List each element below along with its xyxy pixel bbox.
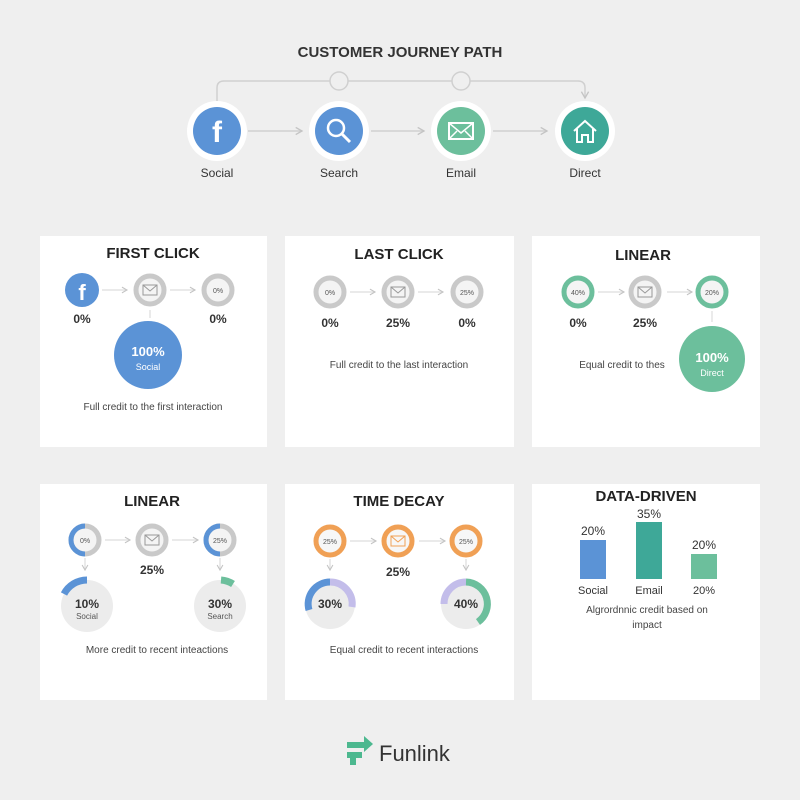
panel: data-driven [532,484,760,700]
icon: social: Social [201,166,233,180]
panel: data-driven: impact [632,620,662,631]
panel: data-driven: 20% [692,538,716,552]
panel: first click: 100% [131,344,165,359]
panel: linear bottom: 30% [208,597,232,611]
panel: linear bottom: More credit to recent inteactions [86,645,228,656]
panel: first click: 0% [73,312,91,326]
panel: data-driven: Algrordnnic credit based on [586,605,708,616]
logo: Funlink: Funlink [379,741,451,766]
panel: time decay: 25% [386,565,410,579]
panel: linear top [532,236,760,447]
icon: email [431,101,491,180]
panel: last click: 0% [325,290,335,297]
icon: direct [555,101,615,180]
panel: first click: FIRST CLICK [106,245,200,262]
panel: data-driven: 20% [693,585,715,597]
panel: time decay: 25% [323,539,337,546]
panel: linear bottom [40,484,267,700]
panel: time decay: Equal credit to recent interactions [330,645,478,656]
panel: linear top: 20% [705,290,719,297]
panel: last click: LAST CLICK [354,246,444,263]
panel: linear bottom: Social [76,612,98,621]
panel: linear top: LINEAR [615,247,671,264]
panel: last click [285,236,514,447]
logo: Funlink [347,736,451,766]
panel: linear top: 100% [695,350,729,365]
panel: linear bottom: 25% [213,538,227,545]
panel: time decay [285,484,514,700]
panel: first click: f [78,280,86,305]
icon: email: Email [446,166,476,180]
journey connector [217,72,585,131]
title: CUSTOMER JOURNEY PATH [298,44,502,61]
panel: first click: Social [136,362,160,372]
panel: time decay: TIME DECAY [353,493,445,510]
panel: last click: 0% [458,316,476,330]
panel: linear top: Equal credit to thes [579,360,665,371]
panel: data-driven: Social [578,585,608,597]
panel: data-driven: DATA-DRIVEN [595,488,697,505]
panel: linear bottom: 0% [80,538,90,545]
panel: last click: Full credit to the last interaction [330,360,468,371]
panel: data-driven: Email [635,585,663,597]
panel: linear top: 40% [571,290,585,297]
panel: linear top: 25% [633,316,657,330]
panel: time decay: 25% [459,539,473,546]
panel: first click [40,236,267,447]
icon: social: f [212,116,223,149]
panel: linear top: Direct [700,368,724,378]
panel: time decay: 40% [454,597,478,611]
icon: search [309,101,369,180]
panel: linear top: 0% [569,316,587,330]
panel: linear bottom: Search [207,612,233,621]
panel: last click: 25% [460,290,474,297]
panel: linear bottom: 25% [140,563,164,577]
icon: direct: Direct [569,166,601,180]
icon: search: Search [320,166,358,180]
panel: last click: 25% [386,316,410,330]
panel: first click: 0% [213,288,223,295]
panel: time decay: 30% [318,597,342,611]
panel: first click: Full credit to the first interaction [84,402,222,413]
panel: linear bottom: LINEAR [124,493,180,510]
panel: first click: 0% [209,312,227,326]
panel: linear bottom: 10% [75,597,99,611]
icon: social [187,101,247,180]
panel: data-driven: 35% [637,507,661,521]
panel: last click: 0% [321,316,339,330]
panel: data-driven: 20% [581,524,605,538]
